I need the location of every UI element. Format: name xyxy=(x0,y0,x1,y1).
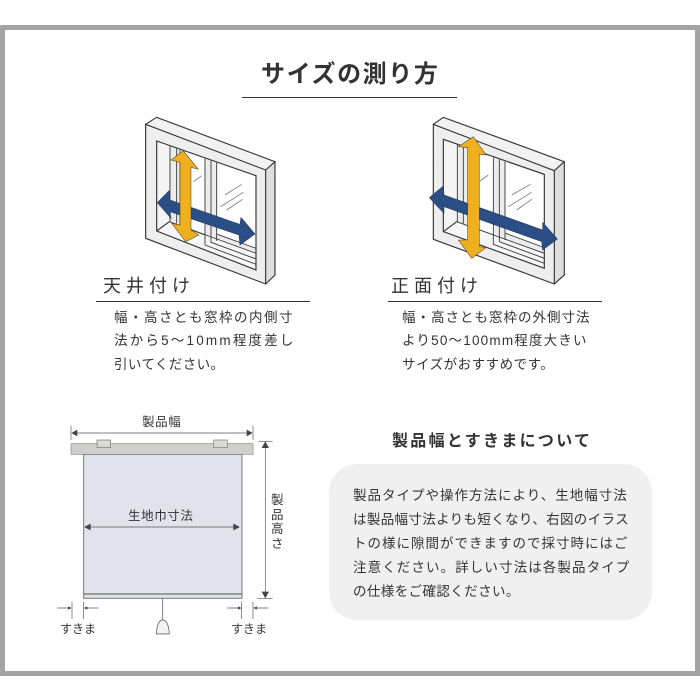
diagram: roller blind dimensions: すきま xyxy=(60,622,96,636)
pull cord xyxy=(156,599,169,634)
section: front mount: 幅・高さとも窓枠の外側寸法 xyxy=(402,309,590,325)
section: front mount: より50～100mm程度大きい xyxy=(402,333,588,348)
head rail xyxy=(71,440,253,454)
arrow: height xyxy=(458,137,486,258)
diagram: roller blind dimensions: 生地巾寸法 xyxy=(128,509,194,523)
section: ceiling mount: 引いてください。 xyxy=(114,357,224,372)
arrow: height xyxy=(171,151,199,242)
illustration: ceiling mount window xyxy=(146,117,275,284)
diagram: roller blind dimensions: 品 xyxy=(271,508,284,522)
panel: note: 製品タイプや操作方法により、生地幅寸法 xyxy=(353,488,628,503)
diagram: roller blind dimensions: さ xyxy=(271,537,284,551)
section: front mount xyxy=(388,276,602,372)
dimension arrows xyxy=(57,426,273,619)
section: front mount: 正面付け xyxy=(391,276,483,296)
diagram: roller blind dimensions xyxy=(57,414,284,636)
title: サイズの測り方 xyxy=(261,60,439,88)
arrow: width xyxy=(429,186,557,250)
section: ceiling mount: 幅・高さとも窓枠の内側寸 xyxy=(114,309,294,325)
blind fabric xyxy=(84,454,242,598)
diagram: roller blind dimensions: 製品幅 xyxy=(142,414,181,429)
panel: note: 注意ください。詳しい寸法は各製品タイプ xyxy=(353,560,630,575)
diagram: roller blind dimensions: 製 xyxy=(271,493,284,507)
section: front mount: サイズがおすすめです。 xyxy=(402,357,554,372)
arrow: width xyxy=(157,191,255,245)
panel: note: トの様に隙間ができますので採寸時にはご xyxy=(353,536,628,551)
panel: note: の仕様をご確認ください。 xyxy=(353,584,520,599)
panel: note xyxy=(329,464,652,620)
section: ceiling mount xyxy=(96,276,310,372)
section: ceiling mount: 法から5～10mm程度差し xyxy=(114,333,296,348)
panel: note: は製品幅寸法よりも短くなり、右図のイラス xyxy=(353,512,629,527)
heading: width and gaps: 製品幅とすきまについて xyxy=(392,432,592,450)
diagram: roller blind dimensions: すきま xyxy=(231,622,267,636)
diagram: roller blind dimensions: 高 xyxy=(271,521,284,536)
section: ceiling mount: 天井付け xyxy=(103,276,195,296)
illustration: front mount window xyxy=(429,117,564,284)
